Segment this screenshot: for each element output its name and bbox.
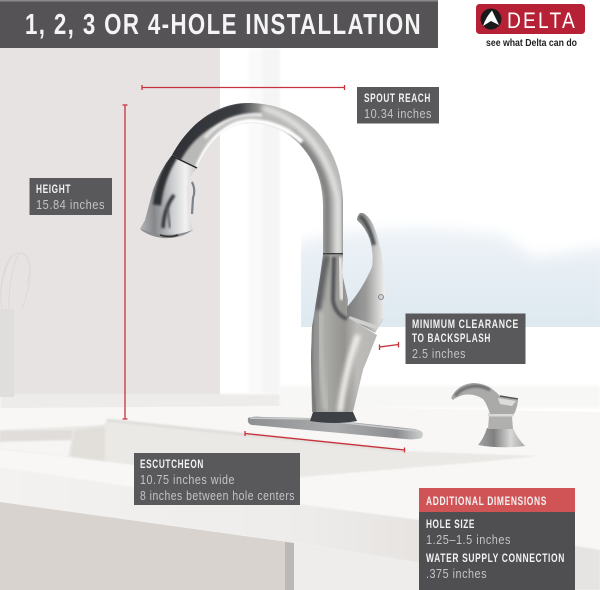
callout: escutcheon: 10.75 inches wide	[140, 473, 235, 487]
title banner	[0, 0, 438, 48]
dimension line: escutcheon	[245, 431, 404, 452]
title text: 1, 2, 3 OR 4-HOLE INSTALLATION	[25, 9, 422, 41]
callout: minimum clearance	[406, 314, 526, 364]
Delta logo	[476, 4, 585, 49]
callout: escutcheon	[134, 453, 300, 505]
dimension line: height	[122, 105, 128, 419]
logo wordmark: DELTA	[507, 8, 577, 33]
soap dispenser	[451, 383, 525, 447]
callout: spout reach: SPOUT REACH	[364, 91, 431, 105]
faucet body	[311, 255, 377, 412]
callout: height: HEIGHT	[36, 182, 71, 196]
dimension line: spout reach	[142, 85, 344, 90]
black base ring	[310, 412, 357, 423]
spray head	[140, 155, 198, 238]
handle	[347, 212, 385, 333]
utensil holder and whisk	[0, 253, 30, 397]
panel: additional dimensions	[419, 488, 575, 590]
callout: minimum clearance: 2.5 inches	[412, 347, 466, 361]
callout: minimum clearance: MINIMUM CLEARANCE	[412, 317, 519, 331]
panel heading	[419, 488, 575, 512]
escutcheon plate	[248, 417, 423, 439]
panel: additional dimensions: 1.25–1.5 inches	[426, 533, 511, 547]
callout: height: 15.84 inches	[36, 198, 105, 212]
panel heading: ADDITIONAL DIMENSIONS	[426, 494, 547, 508]
callout: minimum clearance: TO BACKSPLASH	[412, 331, 491, 345]
logo tagline: see what Delta can do	[486, 38, 577, 49]
spout	[172, 103, 343, 255]
callout: spout reach: 10.34 inches	[364, 107, 432, 121]
logo emblem	[480, 8, 502, 30]
callout: spout reach	[357, 87, 439, 124]
dimension line: backsplash clearance	[380, 342, 398, 350]
panel: additional dimensions: .375 inches	[426, 567, 487, 581]
callout: height	[30, 178, 112, 215]
panel: additional dimensions: HOLE SIZE	[426, 517, 475, 531]
callout: escutcheon: 8 inches between hole centers	[140, 489, 295, 503]
faucet	[135, 98, 423, 439]
callout: escutcheon: ESCUTCHEON	[140, 457, 204, 471]
